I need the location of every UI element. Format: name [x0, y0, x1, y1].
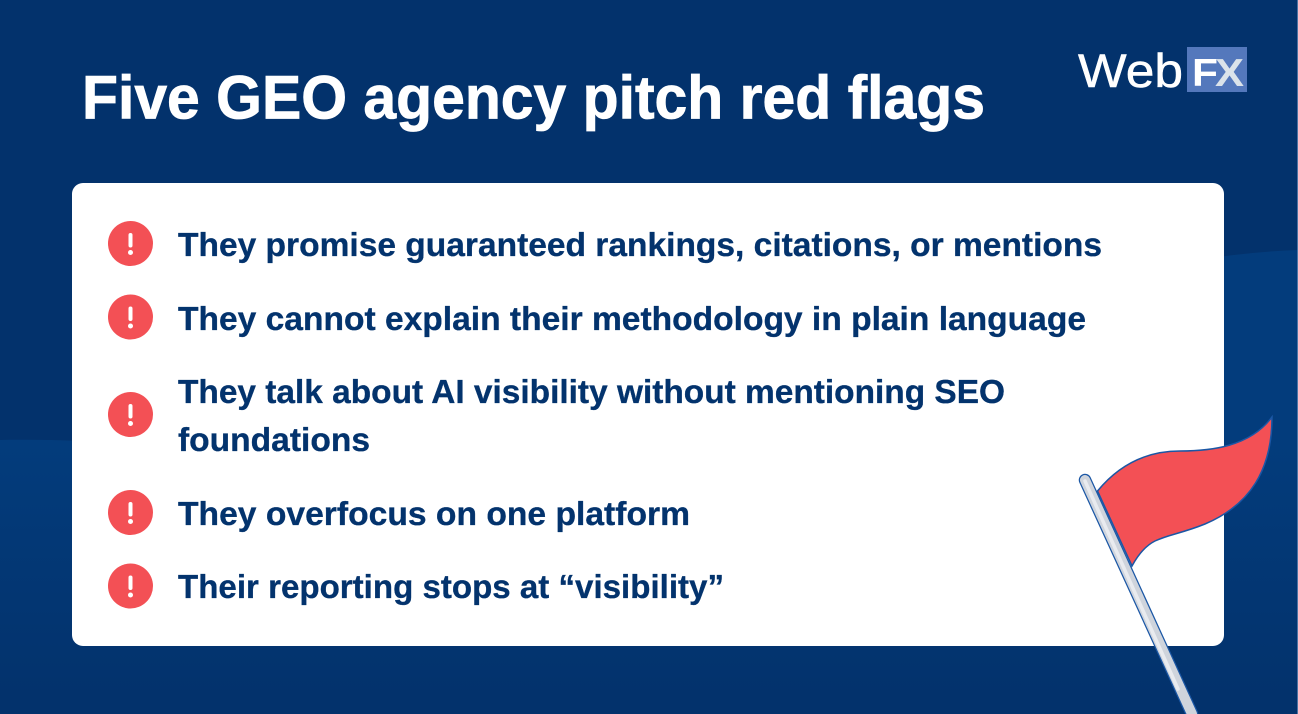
item 2: They cannot explain their methodology in plain language: [178, 300, 1086, 337]
item 4: They overfocus on one platform: [178, 495, 690, 532]
logo: WebFX: [1078, 44, 1247, 97]
title: Five GEO agency pitch red flags: [82, 64, 985, 132]
item 1: They promise guaranteed rankings, citations, or mentions: [178, 226, 1102, 263]
panel: red flags list: [72, 183, 1224, 646]
icon: red flag: [1085, 417, 1272, 714]
item 3: [108, 373, 1005, 458]
item 5: Their reporting stops at “visibility”: [178, 568, 724, 605]
logo: WebFX: F: [1192, 52, 1218, 95]
logo: WebFX: Web: [1078, 44, 1183, 97]
item 3: foundations: [178, 421, 370, 458]
logo: WebFX: X: [1215, 52, 1244, 95]
item 3: They talk about AI visibility without mentioning SEO: [178, 373, 1005, 410]
